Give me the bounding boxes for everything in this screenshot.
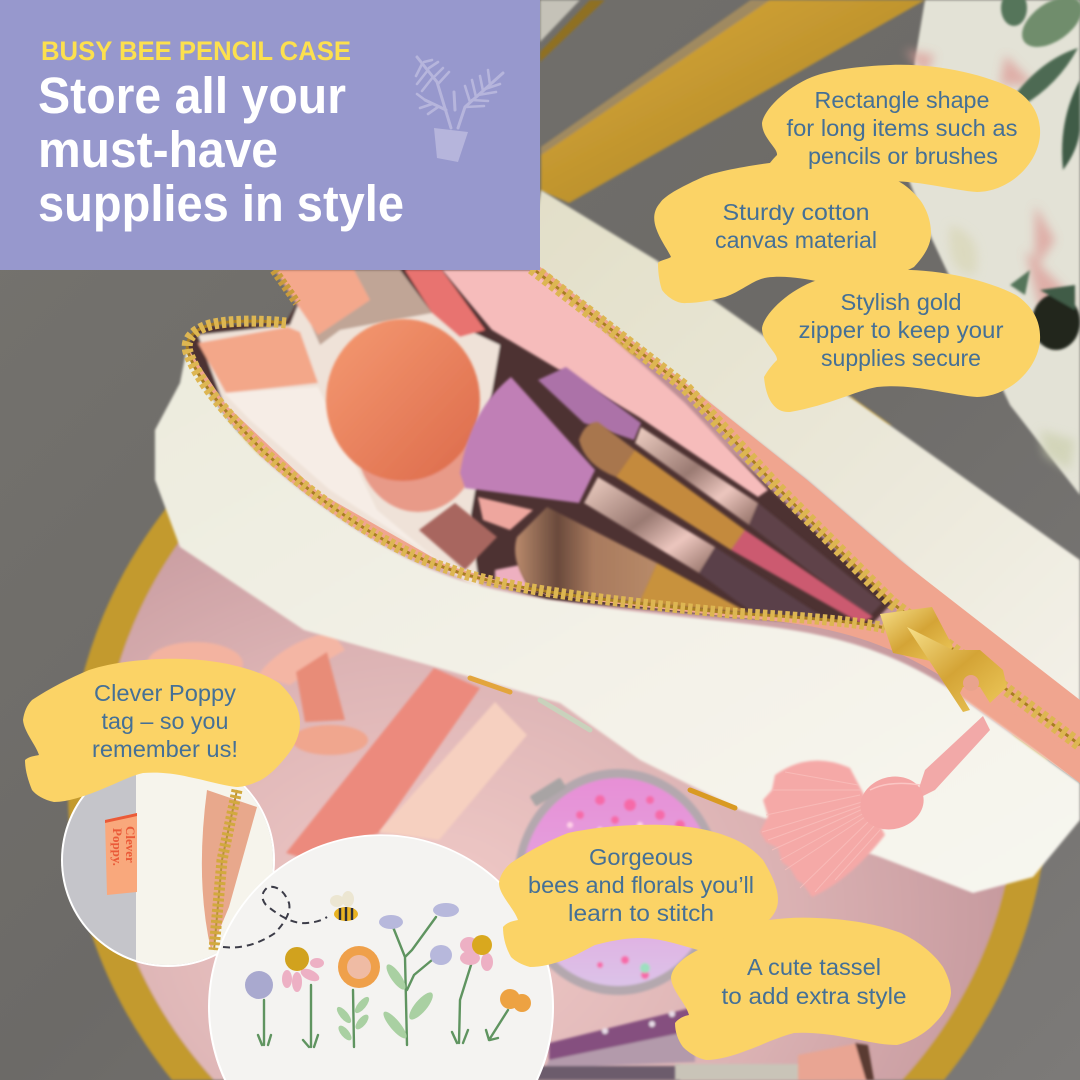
red item behind the palette <box>405 270 485 337</box>
callout: gold zipper: supplies secure <box>821 345 981 371</box>
pale lipstick <box>379 702 527 840</box>
case interior <box>187 262 892 627</box>
callout: Clever Poppy tag: tag – so you <box>102 708 228 734</box>
back canvas panel <box>529 190 1080 720</box>
callout: gold zipper: Stylish gold <box>840 289 962 315</box>
callout: gold zipper <box>762 270 1040 412</box>
pencil case <box>155 190 1080 897</box>
callout: rectangle shape: Rectangle shape <box>814 87 990 113</box>
main heading: must-have <box>38 121 278 178</box>
callout: rectangle shape <box>762 65 1040 207</box>
front zipper tape <box>187 347 1080 783</box>
callout: bees and florals <box>499 825 778 967</box>
callout: cotton canvas <box>654 162 931 303</box>
embroidered edge peeking out <box>470 678 735 808</box>
callout: cotton canvas: Sturdy cotton <box>722 199 870 225</box>
detail circle: Clever Poppy tag <box>61 772 275 967</box>
title panel <box>0 0 540 270</box>
callout: rectangle shape: for long items such as <box>786 115 1018 141</box>
callout: gold zipper: zipper to keep your <box>798 317 1004 343</box>
embroidered flowers <box>245 903 531 1047</box>
main heading: Store all your <box>38 67 346 124</box>
silver brush <box>635 427 882 617</box>
icon: potted plant <box>416 57 503 162</box>
dashed bee trail <box>223 887 327 947</box>
callout: bees and florals: Gorgeous <box>589 844 693 870</box>
callout: cute tassel <box>671 918 951 1060</box>
gold zipper pull <box>880 607 1007 712</box>
coral lip tube <box>286 668 480 860</box>
woven label <box>105 813 138 895</box>
floral box in the top right corner <box>905 0 1080 495</box>
back zipper tape <box>529 258 1080 783</box>
pink hair clip <box>147 632 368 755</box>
gold zipper teeth front <box>187 321 885 628</box>
callout: cute tassel: to add extra style <box>722 983 906 1009</box>
bee <box>330 891 358 921</box>
makeup brush at the bottom <box>675 1043 874 1080</box>
tan foundation brush <box>515 507 749 613</box>
callout: cotton canvas: canvas material <box>715 227 877 253</box>
glitter compact mirror <box>514 769 722 995</box>
detail circle: bee and floral embroidery <box>200 830 560 1080</box>
pink palette <box>442 270 768 497</box>
woven label: Clever <box>123 826 138 863</box>
main heading: supplies in style <box>38 175 404 232</box>
callout: rectangle shape: pencils or brushes <box>808 143 998 169</box>
brown tip brush with pink handle <box>579 422 873 623</box>
gold zipper teeth back <box>274 268 1080 745</box>
purple glitter tube <box>535 1008 695 1080</box>
callout: bees and florals: bees and florals you’ll <box>528 872 754 898</box>
gold stool leg top <box>540 0 925 203</box>
front canvas panel <box>155 347 1080 893</box>
small pink makeup items <box>419 497 533 590</box>
orange sponge <box>326 319 480 512</box>
purple brush behind <box>538 367 641 440</box>
callout: Clever Poppy tag: remember us! <box>92 736 238 762</box>
eyebrow heading: BUSY BEE PENCIL CASE <box>41 36 351 66</box>
callout: bees and florals: learn to stitch <box>568 900 714 926</box>
stool with pink seat <box>68 320 1048 1080</box>
pink tassel <box>760 716 990 897</box>
callout: Clever Poppy tag <box>23 659 300 802</box>
woven label: Poppy. <box>110 828 125 866</box>
callout: Clever Poppy tag: Clever Poppy <box>94 680 236 706</box>
purple fan brush <box>460 377 823 617</box>
callout: cute tassel: A cute tassel <box>747 954 881 980</box>
